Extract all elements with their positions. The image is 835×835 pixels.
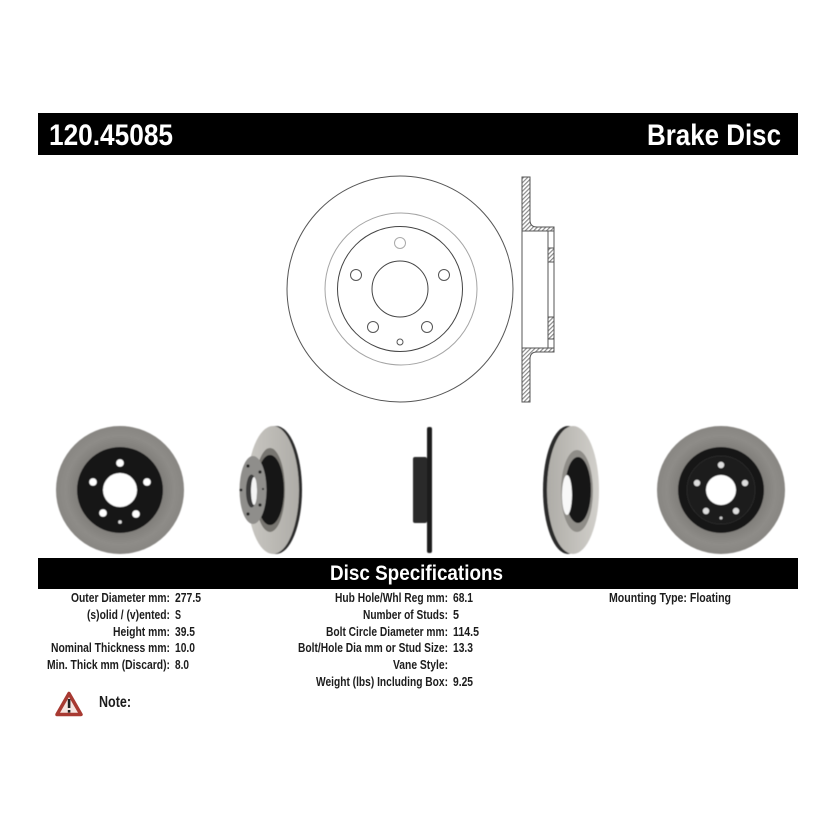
photo: rotor angled view showing hub [240, 426, 302, 554]
spec column 2: Number of Studs: [363, 608, 448, 622]
spec column 1: Height mm: [113, 625, 170, 639]
header bar [38, 113, 798, 155]
spec column 2: Hub Hole/Whl Reg mm: [335, 591, 448, 605]
spec column 1: Outer Diameter mm: [71, 591, 170, 605]
photo: rotor angled view from back [543, 426, 599, 554]
technical drawing: side section view [522, 177, 554, 402]
spec column 1: 277.5 [175, 591, 201, 605]
spec column 2 [298, 591, 479, 689]
spec column 2: 114.5 [453, 625, 479, 639]
spec column 1: (s)olid / (v)ented: [87, 608, 170, 622]
spec column 1: 39.5 [175, 625, 195, 639]
spec column 2: 13.3 [453, 641, 473, 655]
spec column 2: 9.25 [453, 675, 473, 689]
spec column 1: S [175, 608, 181, 622]
part number: 120.45085 [49, 119, 173, 152]
spec column 2: 68.1 [453, 591, 473, 605]
photo: rotor rear view [657, 426, 785, 554]
spec column 3: Mounting Type: Floating [609, 591, 731, 605]
technical drawing: front view [287, 176, 513, 402]
product type: Brake Disc [647, 119, 781, 152]
photo: rotor edge view [413, 427, 432, 553]
spec column 1: 8.0 [175, 658, 189, 672]
spec column 1: Min. Thick mm (Discard): [47, 658, 170, 672]
spec column 1: Nominal Thickness mm: [51, 641, 170, 655]
spec column 2: Bolt Circle Diameter mm: [326, 625, 448, 639]
spec column 1: 10.0 [175, 641, 195, 655]
photo: rotor front view [56, 426, 184, 554]
spec column 2: 5 [453, 608, 459, 622]
spec column 1 [47, 591, 201, 672]
spec column 2: Vane Style: [393, 658, 448, 672]
spec column 2: Bolt/Hole Dia mm or Stud Size: [298, 641, 448, 655]
icon: warning triangle [57, 694, 81, 714]
note label: Note: [99, 694, 131, 711]
spec column 2: Weight (lbs) Including Box: [316, 675, 448, 689]
section heading: disc specifications [38, 558, 798, 589]
section heading: disc specifications: Disc Specifications [330, 562, 503, 585]
